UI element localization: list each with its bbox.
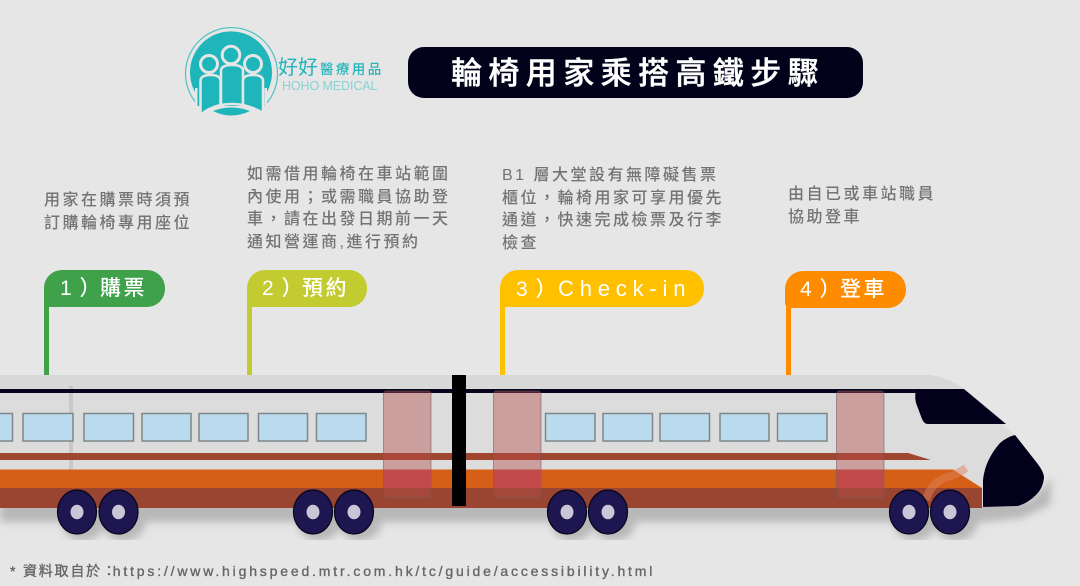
step 2 description: 內使用；或需職員協助登 [247, 189, 451, 206]
coupling bar [452, 375, 466, 506]
high-speed train [0, 375, 1054, 540]
logo text: Chinese name: 好好醫療用品 [278, 57, 384, 79]
title: 輪椅用家乘搭高鐵步驟 [451, 56, 825, 91]
logo emblem [184, 27, 278, 116]
step 4 description [788, 185, 936, 226]
watermark [926, 468, 966, 500]
step 2 description: 車，請在出發日期前一天 [247, 211, 451, 228]
step 2 stem [247, 300, 252, 375]
train body [0, 375, 1044, 507]
step 3 description [502, 166, 724, 252]
step 1 description: 用家在購票時須預 [44, 192, 192, 209]
roof line [0, 389, 950, 393]
step 3 label [500, 270, 704, 307]
step 4 description: 協助登車 [788, 209, 862, 226]
step 2 label [247, 270, 367, 307]
title [408, 47, 863, 98]
step 1 description: 訂購輪椅專用座位 [44, 215, 192, 232]
step 4 label [785, 271, 906, 308]
brown stripe [0, 453, 931, 460]
step 3 description: 櫃位，輪椅用家可享用優先 [502, 190, 724, 207]
car joint [69, 386, 73, 508]
step 3 label: 3 ）Check-in [516, 276, 691, 301]
step 2 description: 通知營運商,進行預約 [247, 234, 420, 251]
step 3 description: 通道，快速完成檢票及行李 [502, 212, 724, 229]
wheels [58, 490, 970, 534]
step 3 stem [500, 300, 505, 375]
step 2 label: 2 ）預約 [262, 277, 349, 300]
windows [0, 414, 827, 441]
step 1 label [44, 270, 165, 307]
step 1 description [44, 191, 192, 232]
dark brown underbody [0, 488, 982, 508]
step 2 description [247, 165, 451, 251]
source footnote: * 資料取自於：https://www.highspeed.mtr.com.hk/tc/guide/accessibility.html [10, 563, 655, 579]
doors [384, 391, 884, 498]
logo: HOHO Medical [184, 27, 384, 116]
step 3 description: B1 層大堂設有無障礙售票 [502, 167, 719, 184]
step 4 description: 由自已或車站職員 [788, 186, 936, 203]
step 2 description: 如需借用輪椅在車站範圍 [247, 166, 451, 183]
step 4 stem [786, 300, 791, 375]
step 3 description: 檢查 [502, 235, 539, 252]
step 1 stem [44, 300, 49, 375]
roof [0, 375, 963, 388]
red door bands [384, 470, 884, 488]
train shadow [0, 478, 1052, 541]
nose [983, 435, 1044, 507]
step 4 label: 4 ）登車 [800, 278, 887, 301]
cab window [915, 389, 1006, 424]
logo text: English name: HOHO MEDICAL [282, 79, 377, 93]
step 1 label: 1 ）購票 [60, 277, 147, 300]
orange stripe [0, 470, 982, 488]
